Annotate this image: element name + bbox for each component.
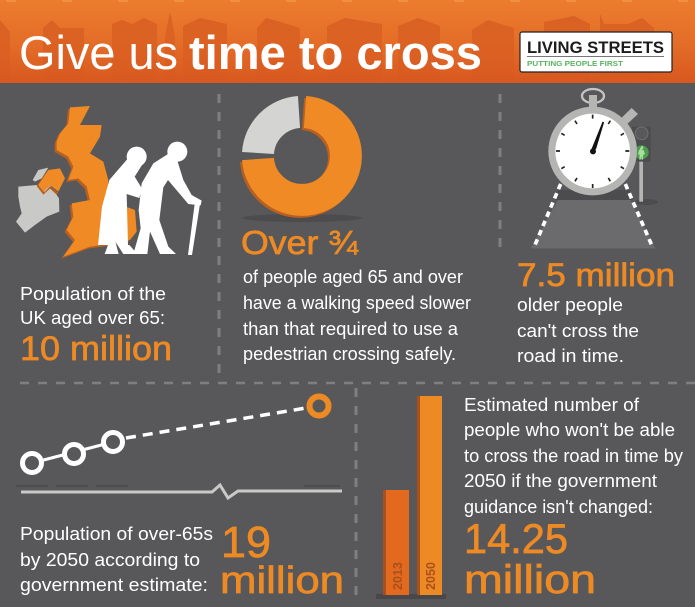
line chart: population projection [16,396,342,498]
text: walking speed: of people aged 65 and over [243,266,463,287]
title: time to cross [189,26,482,79]
bar: 2050 [417,396,442,595]
text: population of over-65s: Population of over-65s [20,523,213,544]
stat: 19 million: million [220,560,344,602]
text: walking speed: have a walking speed slower [243,292,471,313]
icon: elderly man [133,142,202,254]
icon: walking stick [188,204,200,255]
icon: elderly woman [98,147,147,254]
stat: 14.25 million: 14.25 [464,515,568,562]
text: population of over-65s: government estimate: [20,574,208,595]
bar chart: 2013 vs 2050 [376,396,446,599]
text: estimated number of people: to cross the road in time by [464,445,684,466]
map: Ireland [16,168,59,233]
stat: 7.5 million: 7.5 million [517,257,675,293]
stopwatch [548,89,638,195]
map: Great Britain and Northern Ireland [37,106,137,259]
stat: 14.25 million: million [464,558,596,602]
stat: 10 million: 10 million [20,330,172,368]
panel: header banner [0,0,695,83]
text: population of over-65s: by 2050 according to [20,549,200,570]
logo: Living Streets: LIVING STREETS [527,38,664,57]
logo: Living Streets [520,32,672,72]
logo: Living Streets: PUTTING PEOPLE FIRST [527,61,624,68]
pedestrian signal [632,127,658,205]
donut chart: over three quarters [242,112,362,222]
stat: over three quarters: Over ¾ [241,224,359,261]
text: estimated number of people: Estimated number of [464,394,640,415]
text: older people: road in time. [517,345,624,366]
text: estimated number of people: people who won't be able [464,419,675,440]
bar: 2013: 2013 [391,562,405,590]
text: estimated number of people: 2050 if the government [464,470,657,491]
icon: map of UK and Ireland with elderly couple [16,106,202,259]
text: estimated number of people: guidance isn't changed: [464,496,653,517]
stat: 19 million: 19 [221,518,271,567]
text: walking speed: than that required to use a [243,318,459,339]
text: older people: can't cross the [517,320,639,341]
icon: stopwatch on road with pedestrian signal [531,89,658,248]
bar: 2050: 2050 [424,562,438,590]
text: population of the UK: Population of the [20,283,166,304]
text: walking speed: pedestrian crossing safely. [243,343,456,364]
title: Give us [19,26,178,79]
text: older people: older people [517,294,623,315]
text: population of the UK: UK aged over 65: [20,307,165,328]
bar: 2013 [383,490,409,595]
road [531,199,655,248]
